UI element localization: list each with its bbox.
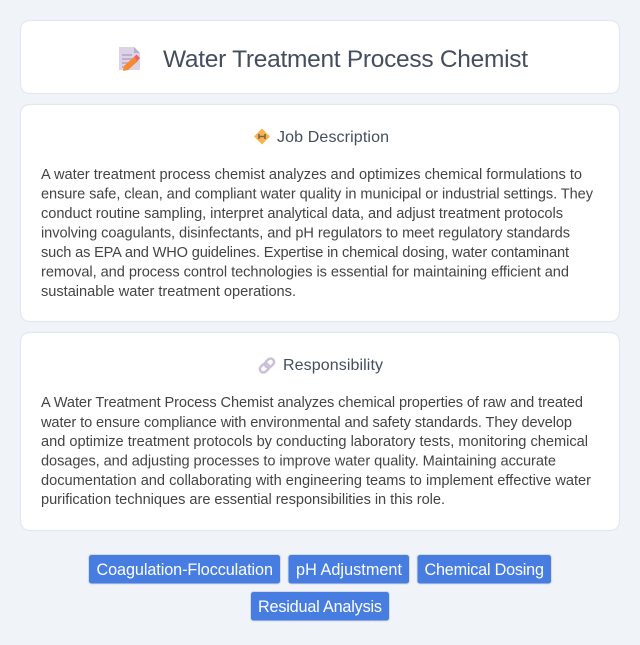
tag: pH Adjustment: [288, 554, 410, 584]
text block: job description: [41, 167, 594, 300]
text block: responsibility: dosages, and adjusting processes to improve water quality. Maintaining accurate: [41, 454, 556, 470]
icon: road sign: [254, 128, 270, 144]
title: Water Treatment Process Chemist: [163, 46, 528, 73]
tag: Coagulation-Flocculation: Coagulation-Flocculation: [96, 561, 273, 579]
text block: job description: involving coagulants, disinfectants, and pH regulators to meet regulatory standards: [41, 226, 570, 242]
panel: job description: [20, 104, 620, 322]
panel: responsibility: [20, 332, 620, 530]
tag: Chemical Dosing: Chemical Dosing: [424, 561, 544, 579]
icon: chain link: [258, 357, 276, 374]
text block: responsibility: purification techniques are essential responsibilities in this role.: [41, 492, 445, 508]
text block: job description: such as EPA and WHO guidelines. Expertise in chemical dosing, water contaminant: [41, 245, 569, 261]
text block: responsibility: water to ensure compliance with environmental and safety standards. They develop: [40, 415, 572, 431]
tag: Residual Analysis: Residual Analysis: [258, 598, 382, 616]
heading: job description: Job Description: [277, 129, 389, 146]
text block: responsibility: [40, 395, 591, 508]
text block: responsibility: and optimize treatment protocols by conducting laboratory tests, monitoring chemical: [41, 434, 588, 450]
icon: document with pencil: [119, 47, 140, 71]
text block: job description: removal, and process control technologies is essential for maintaining efficient and: [41, 264, 569, 280]
tag: Residual Analysis: [250, 592, 390, 621]
text block: job description: A water treatment process chemist analyzes and optimizes chemical formulations to: [41, 167, 582, 183]
text block: job description: conduct routine sampling, interpret analytical data, and adjust treatment protocols: [41, 206, 563, 222]
text block: job description: ensure safe, clean, and compliant water quality in municipal or industrial settings. They: [41, 186, 594, 202]
heading: responsibility: Responsibility: [283, 357, 383, 374]
text block: responsibility: documentation and collaborating with engineering teams to implement effective water: [41, 473, 591, 489]
tag: pH Adjustment: pH Adjustment: [296, 561, 402, 579]
tag: Chemical Dosing: [417, 554, 552, 584]
tag: Coagulation-Flocculation: [88, 554, 280, 584]
panel: title card: [20, 20, 620, 94]
text block: job description: sustainable water treatment operations.: [41, 284, 296, 300]
text block: responsibility: A Water Treatment Process Chemist analyzes chemical properties of raw and treated: [41, 395, 583, 411]
